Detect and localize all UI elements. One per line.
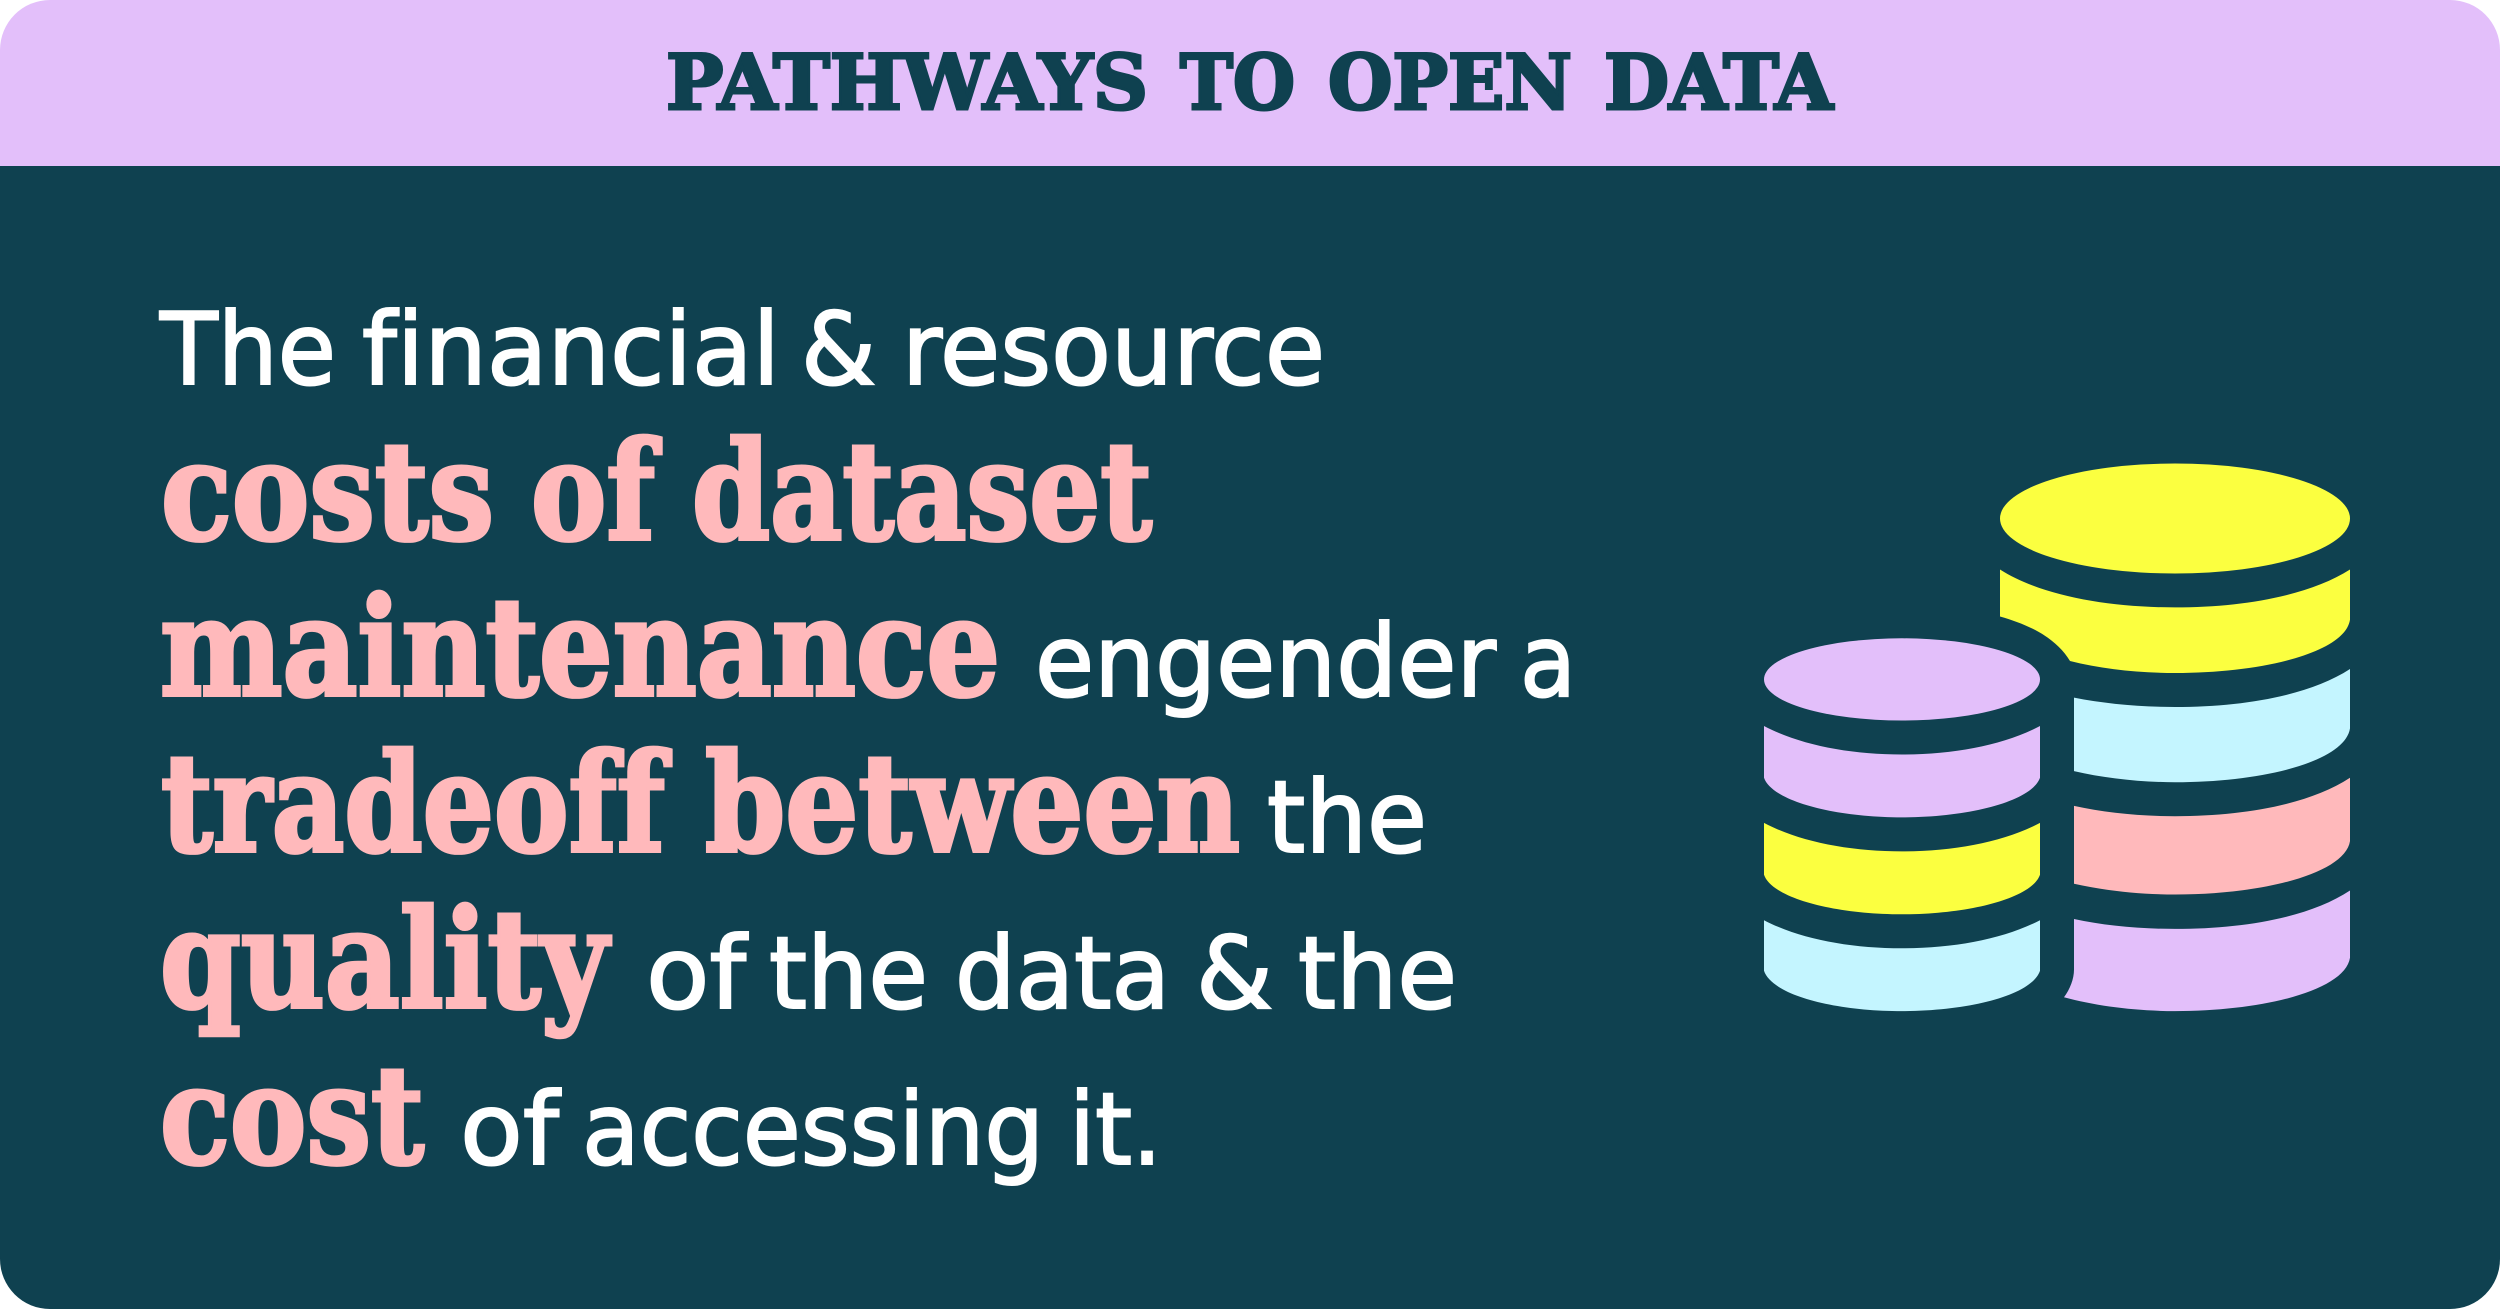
line 2 emphasis: of [531,412,661,572]
line 3 text: a [1520,603,1576,720]
text block: main statement [159,291,1576,1196]
large stack purple band [2064,890,2350,1011]
line 3 text: engender [1035,603,1497,720]
large stack blue band [2074,669,2350,782]
line 1: The [159,291,336,408]
large stack [2000,464,2350,1011]
heading: PATHWAYS [666,38,1148,127]
line 4 emphasis: tradeoff [161,724,671,884]
panel: header band [0,0,2500,166]
line 5 text: data [955,915,1170,1032]
line 1: financial [362,291,780,408]
line 5 text: of [646,915,749,1032]
line 2 emphasis: dataset [692,412,1152,572]
small stack yellow band [1764,823,2040,914]
line 2 emphasis: costs [161,412,494,572]
line 6 emphasis: cost [160,1036,424,1196]
large stack pink band [2074,778,2350,894]
line 5 text: the [769,915,928,1032]
line 1: resource [902,291,1325,408]
heading: OPEN [1328,38,1572,127]
line 5 text: & [1196,915,1273,1032]
large stack top disc [2000,464,2350,574]
heading: TO [1180,38,1295,127]
line 2 emphasis [161,412,1152,572]
small stack [1764,638,2040,1011]
line 5 emphasis: quality [160,880,611,1040]
small stack top disc [1764,638,2040,721]
heading: DATA [1604,38,1834,127]
small stack blue band [1764,920,2040,1011]
line 6 text: it. [1069,1071,1162,1188]
line 1 [159,291,1325,408]
large stack yellow band [2000,570,2350,673]
line 5 text: the [1298,915,1457,1032]
line 4 text: the [1267,759,1427,876]
heading [666,38,1834,127]
line 3 emphasis: maintenance [160,568,1000,728]
line 6 text: of [460,1071,562,1188]
line 1: & [801,291,876,408]
line 4 emphasis: between [705,724,1240,884]
icon: stacked database cylinders [1764,464,2350,1011]
line 5 text [646,915,1457,1032]
line 4 emphasis [161,724,1240,884]
small stack purple band [1764,726,2040,817]
line 6 text: accessing [582,1071,1044,1188]
